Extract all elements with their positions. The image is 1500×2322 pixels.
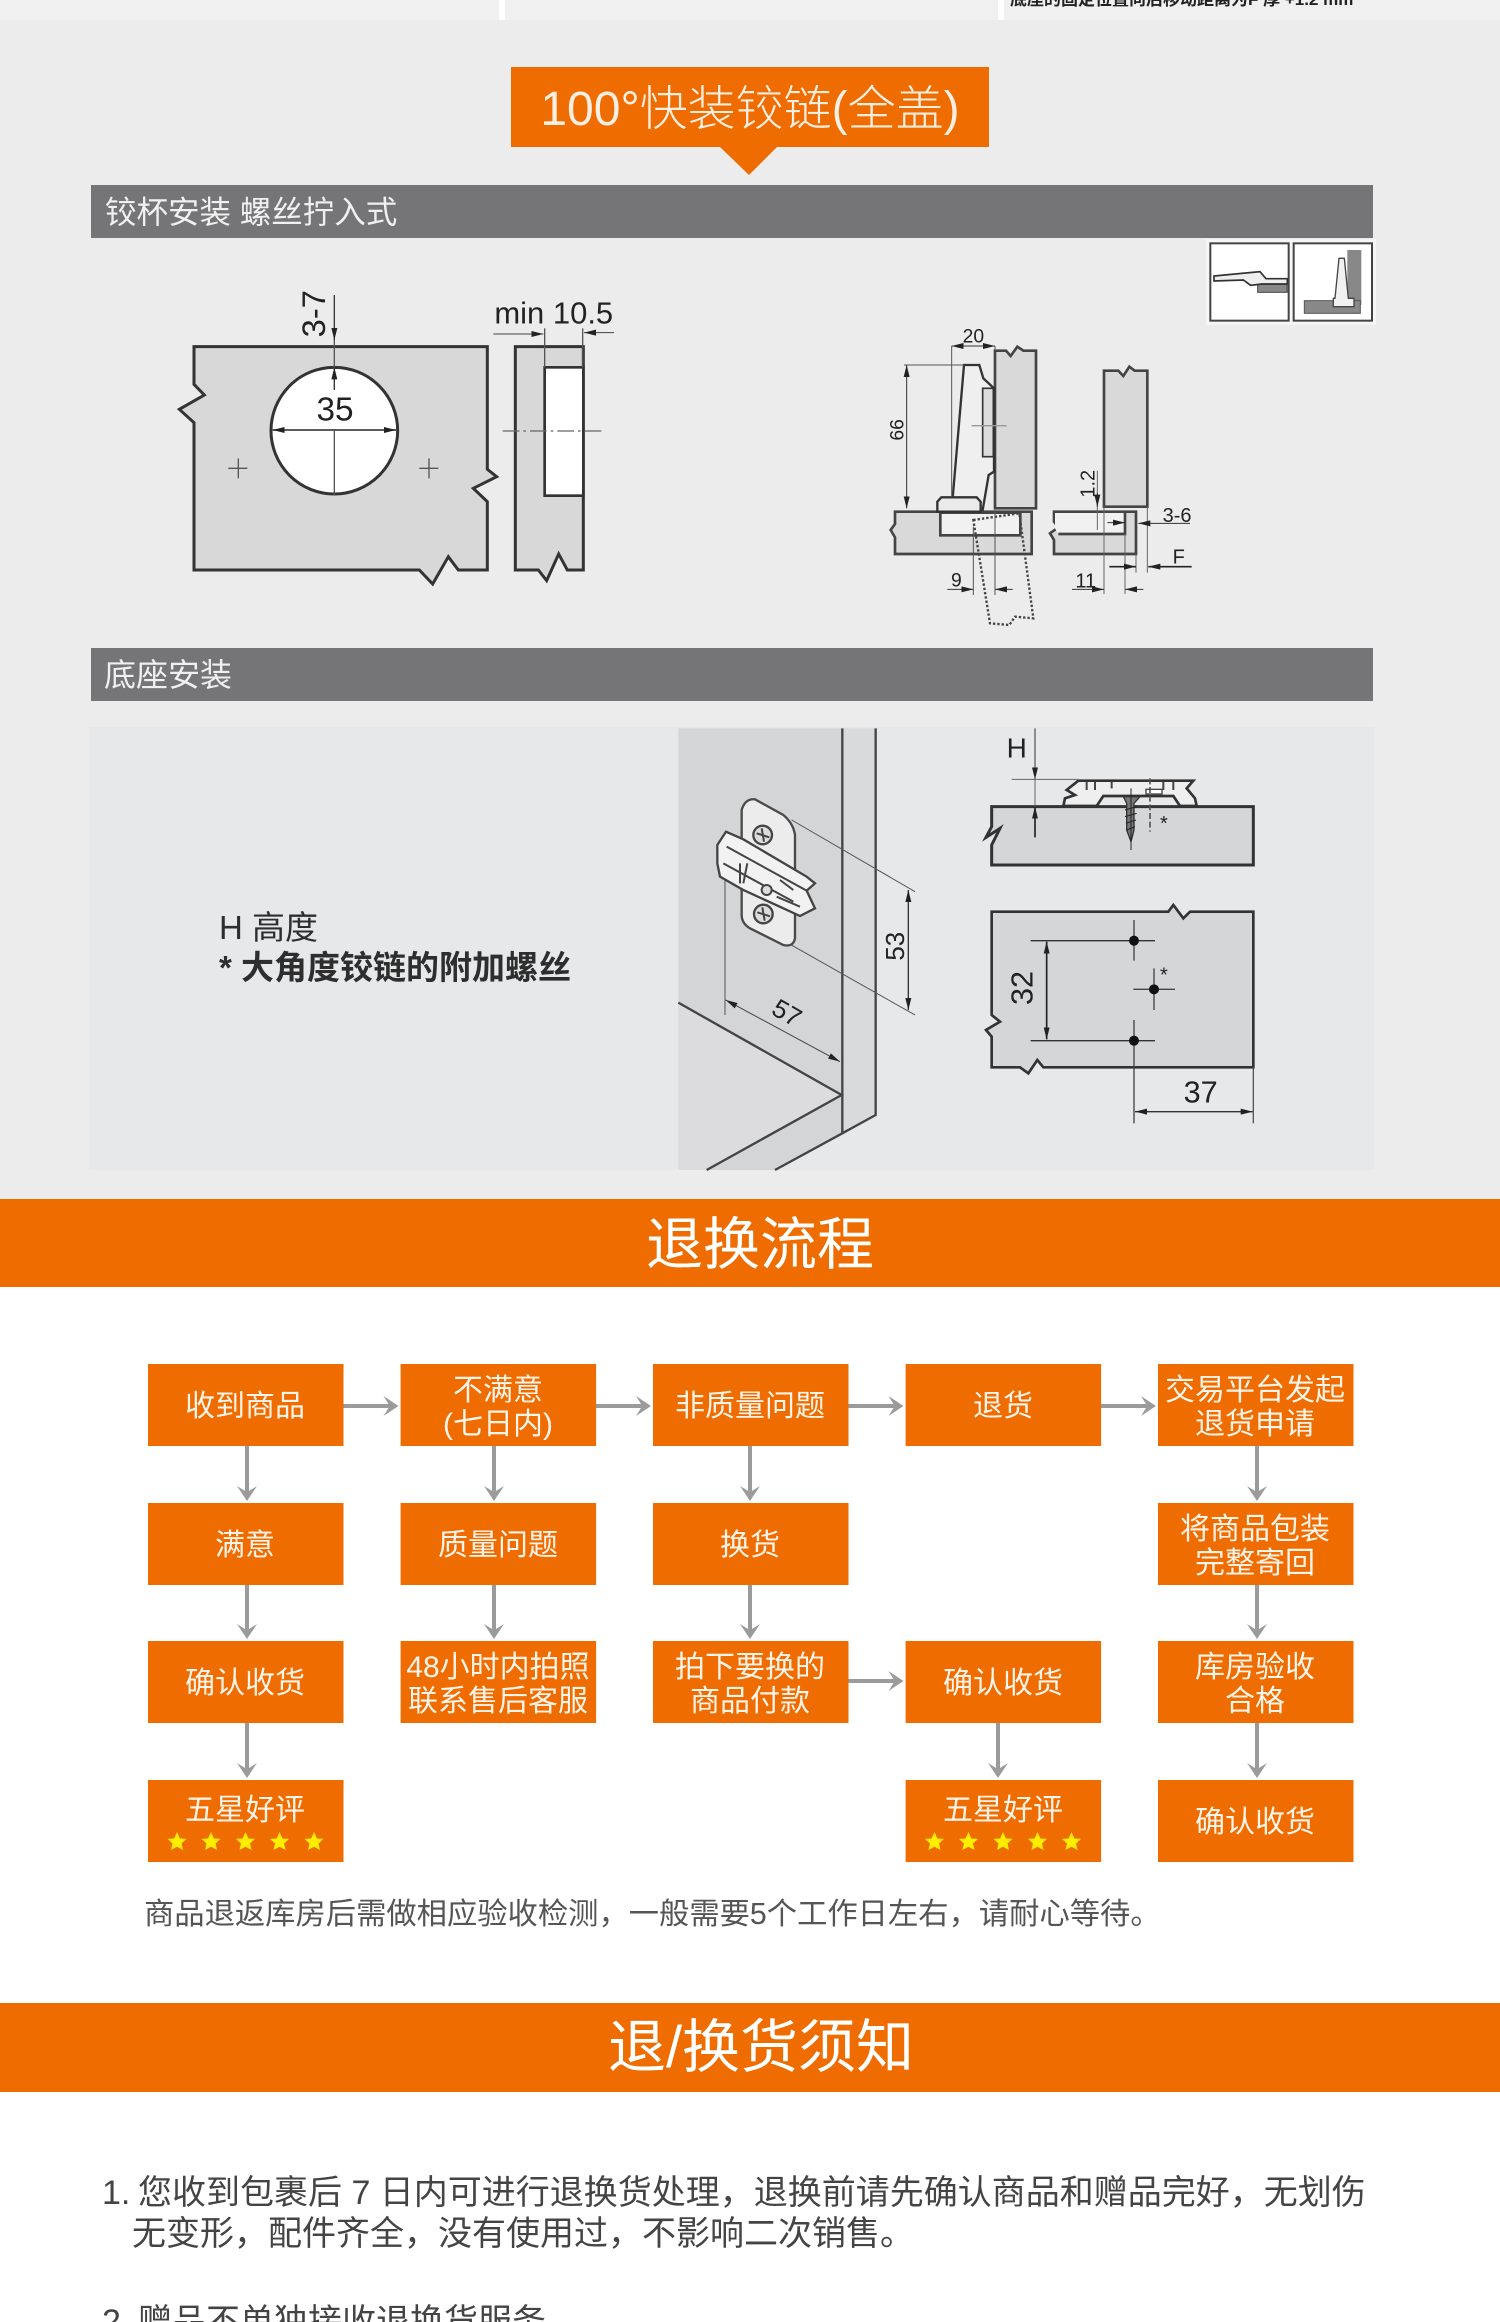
note: legend text — [219, 909, 571, 986]
arrow — [596, 1396, 651, 1416]
drawing: hinge side view with dimensions: 9 — [951, 571, 962, 592]
step: non-quality issue — [653, 1364, 848, 1446]
arrow — [1101, 1396, 1156, 1416]
drawing: hinge side view with dimensions: 20 — [963, 327, 984, 348]
cabinet panel — [891, 512, 1032, 554]
section band: return process: 退换流程 — [646, 1213, 874, 1277]
drawing: base plate side section: H — [1007, 732, 1027, 763]
icon: mounting plate — [717, 799, 815, 945]
step: not satisfied — [401, 1364, 596, 1446]
door panel — [995, 347, 1036, 508]
step: five-star review: 五星好评 — [943, 1794, 1063, 1827]
step: confirm receipt: 确认收货 — [943, 1667, 1063, 1700]
drawing: cup drilling dimensions: 3-7 — [295, 290, 332, 337]
dotted open door — [973, 513, 1033, 625]
drawing: hole pattern with dimensions — [986, 905, 1253, 1123]
step: quality issue — [401, 1503, 596, 1585]
section header: cup installation — [91, 185, 1373, 238]
step: warehouse inspection — [1158, 1641, 1354, 1723]
step: contact after-sales: 48小时内拍照 — [406, 1651, 590, 1684]
drawing: hinge side view with dimensions: F — [1173, 546, 1185, 568]
text block: notice item 1: 您收到包裹后 7 日内可进行退换货处理，退换前请先确认商品和赠品完好，无划伤 — [138, 2174, 1366, 2212]
step: pack goods and return — [1158, 1503, 1354, 1585]
drawing: hole pattern with dimensions: * — [1160, 965, 1168, 987]
drawing: hinge side view with dimensions: 1.2 — [1078, 470, 1100, 498]
flowchart: return and exchange process — [148, 1364, 1354, 1862]
arrow — [848, 1396, 904, 1416]
section band: return notice: 退/换货须知 — [608, 2015, 914, 2080]
drawing: hinge side view with dimensions — [887, 327, 1192, 625]
step: non-quality issue: 非质量问题 — [675, 1390, 825, 1423]
step: pay for replacement: 拍下要换的 — [675, 1651, 825, 1684]
step: warehouse inspection: 库房验收 — [1195, 1651, 1315, 1684]
drawing: hinge side view with dimensions: 66 — [887, 419, 908, 441]
drawing: perspective of bracket in cabinet: 57 — [767, 993, 807, 1033]
step: five-star review: 五星好评 — [185, 1794, 305, 1827]
step: five-star review — [148, 1780, 344, 1862]
step: confirm receipt: 确认收货 — [185, 1667, 305, 1700]
drawing: base plate side section — [986, 728, 1253, 865]
step: file return request: 交易平台发起 — [1165, 1374, 1345, 1407]
arrow — [740, 1446, 760, 1501]
text block: notice item 1: 无变形，配件齐全，没有使用过，不影响二次销售。 — [132, 2215, 914, 2253]
hinge arm — [952, 365, 994, 510]
section header: cup installation: 铰杯安装 螺丝拧入式 — [105, 194, 397, 230]
drawing: hole pattern with dimensions: 37 — [1184, 1076, 1218, 1110]
arrow — [237, 1446, 257, 1501]
step: contact after-sales: 联系售后客服 — [408, 1685, 588, 1718]
step: pack goods and return: 完整寄回 — [1195, 1547, 1315, 1580]
arrow — [237, 1585, 257, 1639]
step: return: 退货 — [973, 1390, 1033, 1423]
drawing: cup drilling dimensions — [179, 290, 614, 584]
panel: base plate installation — [89, 727, 1374, 1170]
step: confirm receipt — [148, 1641, 344, 1723]
step: pay for replacement: 商品付款 — [690, 1685, 810, 1718]
drawing: perspective of bracket in cabinet — [678, 728, 915, 1170]
arrow — [484, 1585, 504, 1639]
step: confirm receipt: 确认收货 — [1195, 1806, 1315, 1839]
step: pay for replacement — [653, 1641, 848, 1723]
step: file return request: 退货申请 — [1195, 1408, 1315, 1441]
step: confirm receipt — [1158, 1780, 1354, 1862]
door panel right — [1104, 367, 1147, 507]
note: legend text: * 大角度铰链的附加螺丝 — [219, 949, 571, 986]
note: inspection time: 商品退返库房后需做相应验收检测，一般需要5个工作日左右，请耐心等待。 — [144, 1897, 1161, 1931]
drawing: cup drilling dimensions: 35 — [316, 392, 354, 429]
section band: return notice — [0, 2003, 1500, 2092]
step: pack goods and return: 将商品包装 — [1180, 1513, 1330, 1546]
arrow — [1247, 1446, 1267, 1501]
step: satisfied: 满意 — [215, 1529, 275, 1562]
section header: base plate installation: 底座安装 — [104, 657, 232, 693]
icons: overlay hinge thumbnails — [1206, 239, 1376, 325]
section band: return process — [0, 1199, 1500, 1287]
step: received goods: 收到商品 — [185, 1390, 305, 1423]
note: legend text: H 高度 — [219, 909, 318, 946]
step: satisfied — [148, 1503, 344, 1585]
step: exchange: 换货 — [720, 1529, 780, 1562]
step: five-star review — [906, 1780, 1101, 1862]
top cropped strip — [0, 0, 1500, 20]
arrow — [848, 1671, 904, 1691]
step: quality issue: 质量问题 — [438, 1529, 558, 1562]
title banner: 100° hinge — [511, 67, 989, 175]
drawing: perspective of bracket in cabinet: 53 — [880, 932, 910, 961]
drawing: hole pattern with dimensions: 32 — [1006, 971, 1040, 1005]
section header: base plate installation — [91, 648, 1373, 701]
arrow — [344, 1396, 398, 1416]
step: confirm receipt — [906, 1641, 1101, 1723]
text block: notice item 1: 1. — [102, 2174, 130, 2212]
drawing: base plate side section: * — [1160, 813, 1168, 835]
step: return — [906, 1364, 1101, 1446]
drawing: hinge side view with dimensions: 11 — [1075, 570, 1096, 592]
drawing: cup drilling dimensions: min 10.5 — [494, 295, 613, 330]
step: not satisfied: (七日内) — [443, 1408, 553, 1441]
arrow — [1247, 1585, 1267, 1639]
step: file return request — [1158, 1364, 1354, 1446]
arrow — [740, 1585, 760, 1639]
arrow — [237, 1723, 257, 1778]
step: received goods — [148, 1364, 344, 1446]
step: exchange — [653, 1503, 848, 1585]
arrow — [484, 1446, 504, 1501]
arrow — [1247, 1723, 1267, 1778]
step: warehouse inspection: 合格 — [1225, 1685, 1285, 1718]
drawing: hinge side view with dimensions: 3-6 — [1163, 505, 1192, 527]
step: contact after-sales — [401, 1641, 596, 1723]
arrow — [988, 1723, 1008, 1778]
step: not satisfied: 不满意 — [453, 1374, 543, 1407]
dimensions — [904, 346, 995, 595]
text block: notice item 1 — [102, 2174, 1366, 2253]
title banner: 100° hinge: 100°快装铰链(全盖) — [540, 83, 960, 136]
